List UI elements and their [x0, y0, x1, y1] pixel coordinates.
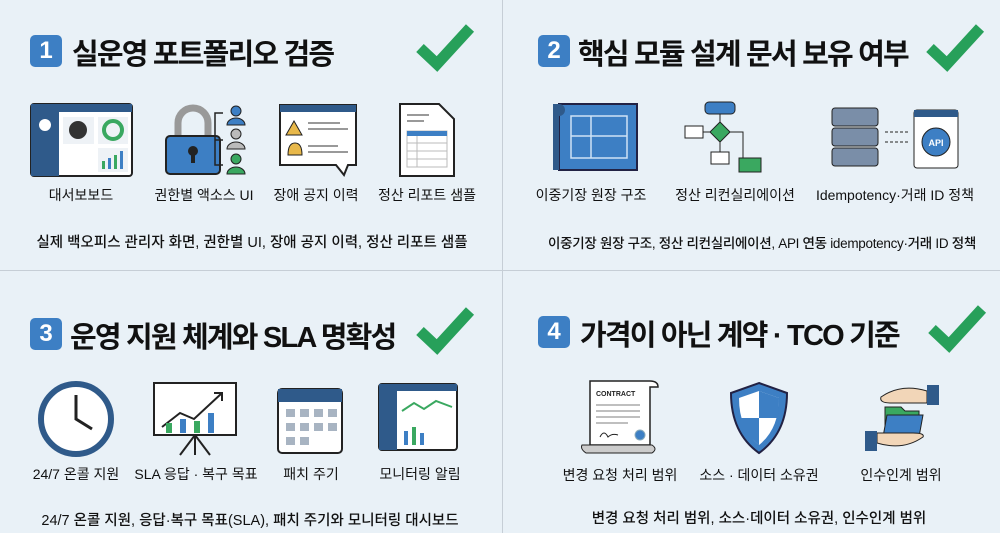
title 3: 운영 지원 체계와 SLA 명확성: [70, 322, 395, 354]
badge 4: 4: [547, 318, 561, 345]
icon labels 4: 인수인계 범위: [860, 467, 942, 483]
panel: 1 portfolio verification: [30, 24, 476, 251]
check icon 1: [416, 24, 474, 72]
icon: lock with users: [165, 104, 246, 175]
icon labels 2: [536, 187, 974, 203]
panel: 4 contract TCO: [538, 305, 986, 527]
icon: calendar: [277, 388, 343, 454]
title 2: 핵심 모듈 설계 문서 보유 여부: [578, 39, 908, 71]
icon: SLA chart: [153, 382, 237, 456]
title 1: 실운영 포트폴리오 검증: [72, 39, 333, 71]
icon: server API: [832, 108, 958, 168]
icon labels 1: 권한별 액소스 UI: [154, 187, 254, 203]
summary 3: 24/7 온콜 지원, 응답·복구 목표(SLA), 패치 주기와 모니터링 대시보드: [41, 513, 459, 529]
icon: flowchart: [684, 102, 762, 172]
badge 1: 1: [39, 37, 53, 64]
icon: report document: [399, 103, 455, 177]
icon: hands with folder: [865, 385, 939, 451]
badge 3: 3: [39, 320, 53, 347]
icon: alert window: [279, 104, 357, 177]
title 4: 가격이 아닌 계약 · TCO 기준: [580, 320, 899, 352]
summary 2: 이중기장 원장 구조, 정산 리컨실리에이션, API 연동 idempotency·거래 ID 정책: [548, 236, 976, 251]
badge 2: 2: [547, 37, 561, 64]
badge 2: [538, 35, 570, 67]
icon: dashboard: [30, 103, 133, 177]
summary 4: 변경 요청 처리 범위, 소스·데이터 소유권, 인수인계 범위: [592, 511, 926, 527]
check icon 3: [416, 307, 474, 355]
summary 1: 실제 백오피스 관리자 화면, 권한별 UI, 장애 공지 이력, 정산 리포트 샘플: [36, 235, 468, 251]
icon labels 3: [33, 466, 461, 482]
icon labels 3: 모니터링 알림: [379, 466, 461, 482]
badge 1: [30, 35, 62, 67]
icon: shield: [730, 382, 788, 454]
icon labels 1: 장애 공지 이력: [273, 187, 359, 203]
icon: contract: [581, 380, 659, 454]
panel: 2 design docs: [536, 24, 984, 251]
icon labels 1: 정산 리포트 샘플: [378, 187, 476, 203]
icon: contract: CONTRACT: [596, 391, 636, 398]
badge 4: [538, 316, 570, 348]
check icon 4: [928, 305, 986, 353]
icon labels 2: 정산 리컨실리에이션: [675, 187, 795, 203]
icon: monitoring: [378, 383, 458, 451]
icon: blueprint: [553, 103, 638, 171]
panel: 3 operations SLA: [30, 307, 474, 529]
check icon 2: [926, 24, 984, 72]
icon labels 4: [563, 467, 942, 483]
icon labels 2: 이중기장 원장 구조: [536, 187, 646, 203]
icon labels 3: 패치 주기: [283, 466, 339, 482]
icon: clock: [38, 381, 114, 457]
icon labels 1: [49, 187, 476, 203]
icon labels 3: SLA 응답 · 복구 목표: [134, 466, 258, 482]
icon labels 1: 대서보보드: [49, 187, 113, 203]
badge 3: [30, 318, 62, 350]
icon labels 3: 24/7 온콜 지원: [33, 466, 119, 482]
icon labels 4: 소스 · 데이터 소유권: [699, 467, 819, 483]
icon labels 2: Idempotency·거래 ID 정책: [816, 187, 974, 203]
icon labels 4: 변경 요청 처리 범위: [563, 467, 677, 483]
icon: server API: API: [928, 138, 944, 148]
